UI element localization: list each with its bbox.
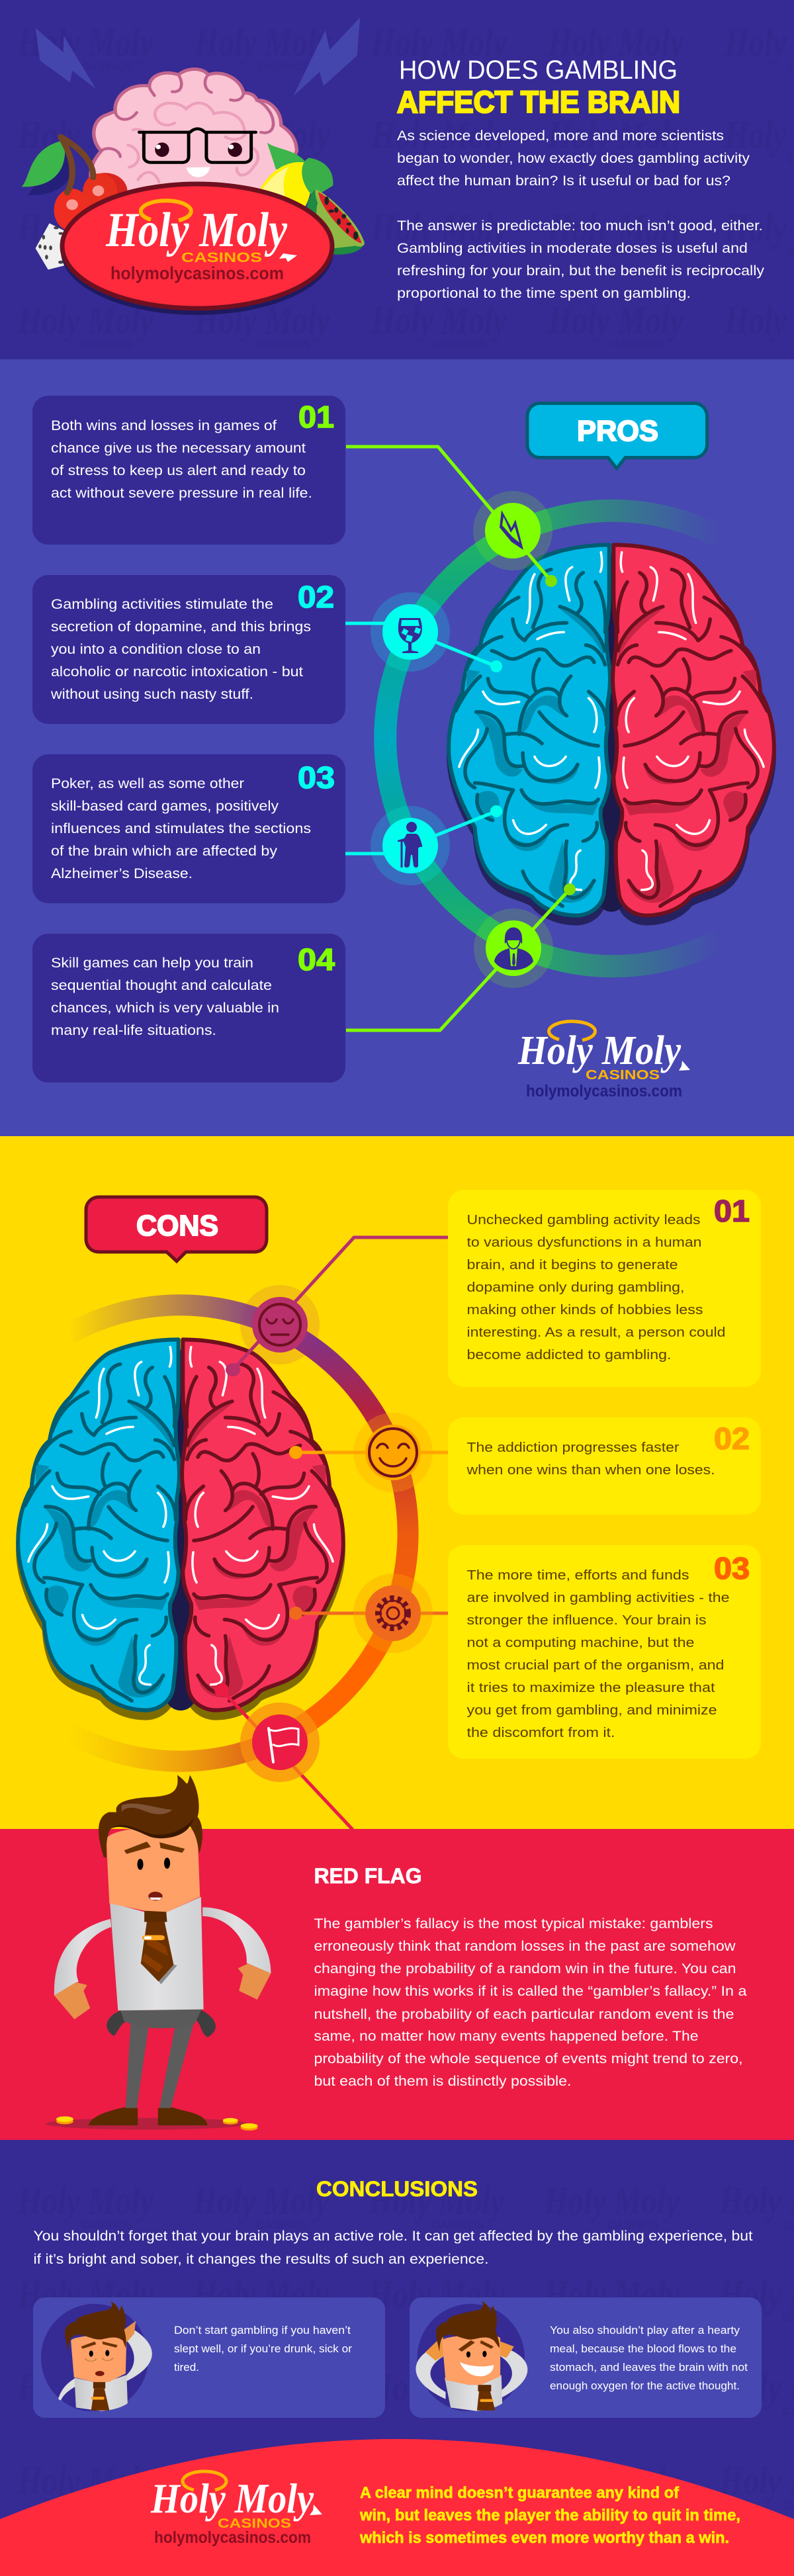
- heading: conclusions: CONCLUSIONS: [316, 2177, 478, 2201]
- red flag text: changing the probability of a random win in the future. You can: [314, 1961, 736, 1976]
- panel: conclusion 1: Don’t start gambling if you haven’t: [174, 2325, 351, 2336]
- panel: cons 02: The addiction progresses faster: [467, 1441, 680, 1455]
- conclusions text: You shouldn’t forget that your brain plays an active role. It can get affected by the gambling experience, but: [33, 2229, 753, 2244]
- icon: pink brain: [91, 69, 297, 195]
- footer message: A clear mind doesn’t guarantee any kind of: [360, 2484, 680, 2502]
- pros speech bubble: PROS: [577, 415, 658, 447]
- panel: cons 02: [448, 1417, 761, 1515]
- panel: cons 01: dopamine only during gambling,: [467, 1280, 684, 1295]
- icon: dice: [36, 223, 68, 270]
- panel: cons 01: 01: [714, 1194, 750, 1228]
- illustration: tired man: [40, 2301, 152, 2411]
- intro text: refreshing for your brain, but the benefit is reciprocally: [397, 263, 765, 279]
- icon: lightning bolts: [36, 17, 360, 97]
- panel: cons 01: to various dysfunctions in a human: [467, 1235, 701, 1250]
- logo: pros section: Holy Moly: [517, 1028, 681, 1073]
- panel: cons 03: the discomfort from it.: [467, 1726, 615, 1740]
- watermark pattern: conclusions: [0, 2140, 794, 2576]
- conclusions text: if it’s bright and sober, it changes the results of such an experience.: [33, 2252, 488, 2267]
- panel: pros 04: many real-life situations.: [51, 1023, 216, 1038]
- panel: pros 01: chance give us the necessary amount: [51, 441, 306, 456]
- cons brain: [18, 1339, 343, 1718]
- panel: cons 03: are involved in gambling activities - the: [467, 1591, 729, 1605]
- panel: cons 01: brain, and it begins to generate: [467, 1258, 678, 1272]
- title: HOW DOES GAMBLING: [399, 56, 678, 85]
- panel: conclusion 1: tired.: [174, 2362, 199, 2374]
- pros connector lines: [345, 447, 570, 1030]
- panel: conclusion 1: slept well, or if you’re drunk, sick or: [174, 2343, 353, 2355]
- red flag text: probability of the whole sequence of events might trend to zero,: [314, 2051, 742, 2066]
- cons speech bubble: [86, 1197, 267, 1261]
- logo: pros section: [517, 1022, 690, 1100]
- panel: pros 03: of the brain which are affected by: [51, 844, 278, 859]
- cons connector dots: [214, 1363, 302, 1697]
- logo: pros section: CASINOS: [586, 1068, 660, 1083]
- icon node: glass: [371, 592, 450, 672]
- conclusions text: [33, 2229, 753, 2267]
- intro text: affect the human brain? Is it useful or bad for us?: [397, 173, 730, 189]
- panel: pros 04: Skill games can help you train: [51, 955, 253, 971]
- intro text: Gambling activities in moderate doses is useful and: [397, 241, 748, 256]
- panel: pros 04: chances, which is very valuable in: [51, 1000, 279, 1016]
- icon: lemon and leaves: [258, 143, 333, 209]
- icon node: elderly person: [371, 806, 450, 885]
- panel: pros 04: 04: [298, 942, 335, 977]
- red flag text: but each of them is distinctly possible.: [314, 2074, 572, 2089]
- icon node: man in suit: [474, 909, 553, 988]
- panel: cons 01: making other kinds of hobbies less: [467, 1303, 703, 1317]
- icon node: lightning: [473, 491, 552, 570]
- glasses: [139, 129, 256, 162]
- icon: watermelon: [306, 189, 365, 255]
- icon node: flag: [240, 1703, 320, 1782]
- panel: pros 01: [32, 396, 345, 545]
- intro text: began to wonder, how exactly does gambling activity: [397, 151, 750, 166]
- cons speech bubble: CONS: [136, 1210, 218, 1242]
- intro text: The answer is predictable: too much isn’t good, either.: [397, 218, 763, 234]
- panel: conclusion 2: You also shouldn’t play after a hearty: [550, 2325, 740, 2336]
- red flag text: The gambler’s fallacy is the most typical mistake: gamblers: [314, 1916, 713, 1932]
- cons arc: [69, 1305, 408, 1761]
- panel: pros 02: without using such nasty stuff.: [50, 687, 253, 702]
- panel: pros 01: 01: [298, 400, 334, 434]
- pros brain: [449, 545, 774, 924]
- panel: cons 02: when one wins than when one loses.: [466, 1463, 715, 1478]
- logo badge: CASINOS: [181, 250, 262, 265]
- panel: pros 03: Poker, as well as some other: [51, 776, 244, 791]
- logo badge: [61, 184, 333, 315]
- red flag text: erroneously think that random losses in the past are somehow: [314, 1939, 736, 1954]
- panel: pros 01: Both wins and losses in games of: [51, 418, 277, 433]
- red flag text: [314, 1916, 747, 2089]
- panel: conclusion 2: meal, because the blood flows to the: [550, 2343, 736, 2355]
- watermark pattern: intro: [0, 0, 794, 359]
- panel: pros 02: Gambling activities stimulate the: [51, 597, 273, 612]
- panel: pros 02: 02: [298, 580, 334, 614]
- title: AFFECT THE BRAIN: [397, 85, 680, 119]
- panel: pros 03: Alzheimer’s Disease.: [51, 866, 193, 881]
- icon node: unhappy face: [240, 1285, 320, 1364]
- intro text: [397, 128, 765, 301]
- panel: conclusion 2: [410, 2297, 762, 2418]
- footer message: [359, 2484, 740, 2547]
- panel: pros 01: act without severe pressure in real life.: [51, 486, 312, 501]
- panel: pros 03: 03: [298, 760, 335, 795]
- icon node: gear: [353, 1574, 433, 1653]
- red flag text: nutshell, the probability of each particular random event is the: [314, 2007, 734, 2022]
- heading: red flag: RED FLAG: [314, 1864, 422, 1888]
- panel: pros 03: [32, 754, 345, 903]
- panel: pros 02: you into a condition close to an: [51, 642, 261, 657]
- pros arc: [385, 511, 721, 966]
- panel: cons 03: most crucial part of the organism, and: [467, 1658, 724, 1673]
- red flag text: imagine how this works if it is called the “gambler’s fallacy.” In a: [314, 1984, 747, 1999]
- title: [397, 56, 680, 119]
- panel: conclusion 2: stomach, and leaves the brain with not: [550, 2362, 748, 2374]
- pros connector dots: [490, 575, 576, 895]
- intro text: proportional to the time spent on gambling.: [397, 286, 691, 301]
- panel: pros 04: [32, 934, 345, 1083]
- panel: pros 04: sequential thought and calculate: [51, 978, 272, 993]
- panel: cons 03: [448, 1545, 761, 1759]
- panel: cons 01: [448, 1190, 761, 1387]
- logo badge: holymolycasinos.com: [110, 263, 284, 283]
- panel: cons 01: become addicted to gambling.: [467, 1348, 671, 1362]
- cons connector lines: [222, 1237, 448, 1830]
- panel: conclusion 2: enough oxygen for the active thought.: [550, 2380, 740, 2392]
- panel: conclusion 1: [33, 2297, 385, 2418]
- panel: cons 01: Unchecked gambling activity leads: [467, 1213, 700, 1227]
- footer message: which is sometimes even more worthy than a win.: [359, 2529, 729, 2547]
- pros speech bubble: [527, 404, 707, 468]
- footer red dome: [0, 2439, 794, 2576]
- illustration: smiling man: [416, 2301, 528, 2411]
- section background: pros: [0, 359, 794, 1136]
- panel: cons 03: 03: [714, 1551, 750, 1585]
- panel: cons 01: interesting. As a result, a person could: [467, 1325, 725, 1340]
- illustration: worried man: [46, 1775, 271, 2131]
- logo badge: Holy Moly: [105, 203, 288, 257]
- footer message: win, but leaves the player the ability to quit in time,: [359, 2507, 740, 2524]
- red flag text: same, no matter how many events happened before. The: [314, 2029, 699, 2044]
- panel: cons 03: you get from gambling, and minimize: [467, 1703, 717, 1718]
- panel: pros 03: influences and stimulates the sections: [51, 821, 311, 836]
- panel: pros 02: [32, 575, 345, 724]
- illustration: brain mascot with logo: [22, 17, 365, 315]
- icon: cherries: [22, 137, 127, 232]
- section background: conclusions: [0, 2140, 794, 2576]
- icon node: smiling face: [353, 1413, 433, 1492]
- panel: pros 02: alcoholic or narcotic intoxication - but: [51, 664, 303, 680]
- section background: cons: [0, 1136, 794, 1829]
- intro text: As science developed, more and more scientists: [397, 128, 724, 144]
- panel: cons 03: not a computing machine, but the: [467, 1636, 695, 1650]
- section background: red flag: [0, 1829, 794, 2140]
- panel: pros 03: skill-based card games, positively: [51, 799, 279, 814]
- logo: footer: Holy Moly: [150, 2475, 314, 2522]
- panel: cons 03: it tries to maximize the pleasure that: [467, 1681, 715, 1695]
- panel: pros 02: secretion of dopamine, and this brings: [51, 619, 311, 635]
- panel: pros 01: of stress to keep us alert and ready to: [51, 463, 306, 478]
- logo: footer: holymolycasinos.com: [154, 2528, 311, 2547]
- logo: footer: [150, 2471, 322, 2547]
- panel: cons 02: 02: [714, 1421, 750, 1456]
- logo: pros section: holymolycasinos.com: [526, 1082, 682, 1100]
- section background: intro: [0, 0, 794, 359]
- panel: cons 03: stronger the influence. Your brain is: [467, 1613, 707, 1628]
- panel: cons 03: The more time, efforts and funds: [467, 1568, 689, 1583]
- logo: footer: CASINOS: [218, 2516, 291, 2531]
